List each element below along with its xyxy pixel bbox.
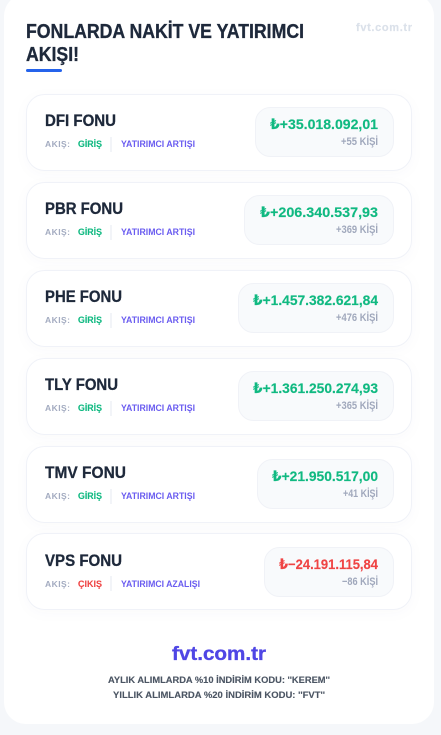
heading underline — [26, 69, 62, 72]
panel: TLY fund — [26, 358, 412, 434]
panel: PBR fund: ₺+206.340.537,93 — [260, 204, 378, 220]
panel: PHE fund: YATIRIMCI ARTIŞI — [121, 315, 195, 325]
panel: DFI fund — [26, 94, 412, 170]
panel: DFI fund: AKIŞ: — [45, 139, 70, 149]
panel: PBR fund: YATIRIMCI ARTIŞI — [121, 227, 195, 237]
panel: TMV fund: ₺+21.950.517,00 — [272, 468, 378, 484]
panel: TLY fund: ₺+1.361.250.274,93 — [253, 380, 378, 396]
panel: TLY fund: YATIRIMCI ARTIŞI — [121, 403, 195, 413]
panel: PBR fund: +369 KİŞİ — [336, 223, 378, 236]
panel: PBR fund: PBR FONU — [45, 199, 123, 218]
panel: VPS fund — [26, 534, 412, 610]
panel: VPS fund: VPS FONU — [45, 551, 122, 570]
panel: DFI fund: YATIRIMCI ARTIŞI — [121, 139, 195, 149]
heading: AKIŞI! — [26, 44, 79, 66]
panel: TLY fund: TLY FONU — [45, 375, 118, 394]
panel: PHE fund: PHE FONU — [45, 287, 122, 306]
panel: PBR fund — [26, 182, 412, 258]
panel: PHE fund: AKIŞ: — [45, 315, 70, 325]
brand watermark: fvt.com.tr — [356, 22, 413, 34]
panel: TMV fund: YATIRIMCI ARTIŞI — [121, 491, 195, 501]
panel: VPS fund: ÇIKIŞ — [78, 579, 102, 589]
panel: TMV fund: +41 KİŞİ — [343, 487, 378, 500]
panel: PHE fund: GİRİŞ — [78, 315, 102, 325]
footer discount codes: AYLIK ALIMLARDA %10 İNDİRİM KODU: ''KEREM'' — [108, 675, 330, 685]
panel: VPS fund: YATIRIMCI AZALIŞI — [121, 579, 200, 589]
panel: PBR fund: GİRİŞ — [78, 227, 102, 237]
panel: PBR fund: AKIŞ: — [45, 227, 70, 237]
panel: TMV fund: GİRİŞ — [78, 491, 102, 501]
panel: VPS fund: ₺−24.191.115,84 — [279, 556, 378, 572]
panel: DFI fund: GİRİŞ — [78, 139, 102, 149]
panel: PHE fund — [26, 270, 412, 346]
panel: VPS fund: −86 KİŞİ — [342, 575, 378, 588]
footer brand: fvt.com.tr — [172, 644, 267, 665]
heading: FONLARDA NAKİT VE YATIRIMCI — [26, 20, 304, 43]
panel: TLY fund: GİRİŞ — [78, 403, 102, 413]
panel: DFI fund: DFI FONU — [45, 111, 116, 130]
panel: TLY fund: +365 KİŞİ — [336, 399, 378, 412]
panel: TMV fund: TMV FONU — [45, 463, 126, 482]
panel: TMV fund: AKIŞ: — [45, 491, 70, 501]
panel: VPS fund: AKIŞ: — [45, 579, 70, 589]
footer discount codes — [108, 675, 330, 700]
footer discount codes: YILLIK ALIMLARDA %20 İNDİRİM KODU: ''FVT'' — [113, 690, 325, 700]
panel: TLY fund: AKIŞ: — [45, 403, 70, 413]
panel: PHE fund: ₺+1.457.382.621,84 — [253, 292, 378, 308]
panel: PHE fund: +476 KİŞİ — [336, 311, 378, 324]
panel: TMV fund — [26, 446, 412, 522]
panel: DFI fund: ₺+35.018.092,01 — [270, 116, 378, 132]
panel: DFI fund: +55 KİŞİ — [341, 135, 378, 148]
heading — [26, 20, 304, 66]
